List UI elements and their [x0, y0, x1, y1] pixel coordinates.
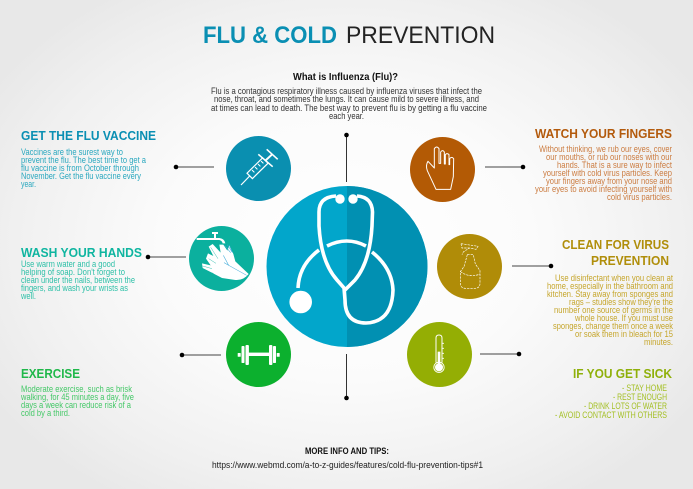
connector — [485, 165, 525, 169]
body text: days a week can reduce risk of a — [21, 400, 131, 410]
connector: bottom — [344, 354, 349, 400]
title: PREVENTION — [346, 22, 495, 49]
heading: GET THE FLU VACCINE — [21, 128, 156, 143]
body text: kitchen. Stay away from sponges and — [547, 289, 673, 299]
connector — [146, 255, 186, 259]
tips list: - REST ENOUGH — [613, 392, 667, 402]
title — [203, 22, 495, 49]
body text: cold by a third. — [21, 408, 70, 418]
connector: top — [344, 133, 349, 182]
icon: pointing hand — [410, 137, 475, 202]
body text: Vaccines are the surest way to — [21, 147, 123, 157]
heading — [562, 237, 669, 268]
panel: clean for virus prevention — [437, 234, 673, 347]
panel: wash your hands — [20, 226, 254, 301]
tips list: - DRINK LOTS OF WATER — [584, 401, 667, 411]
body text: whole house. If you must use — [574, 313, 673, 323]
footer: more info and tips — [212, 446, 483, 470]
body text: yourself with cold virus particles. Keep — [543, 168, 672, 178]
body text — [21, 147, 146, 189]
body text — [20, 259, 135, 301]
body text — [547, 273, 673, 347]
body text: prevent the flu. The best time to get a — [21, 155, 146, 165]
body text: helping of soap. Don't forget to — [21, 267, 125, 277]
intro text: Flu is a contagious respiratory illness caused by influenza viruses that infect the — [211, 86, 482, 96]
body text: Moderate exercise, such as brisk — [21, 384, 132, 394]
panel: watch your fingers — [410, 126, 672, 202]
body text: your fingers away from your nose and — [546, 176, 672, 186]
intro text: each year. — [329, 111, 364, 121]
body text: November. Get the flu vaccine every — [21, 171, 141, 181]
body text: well. — [20, 291, 36, 301]
footer heading: MORE INFO AND TIPS: — [305, 446, 389, 456]
intro text — [211, 86, 487, 121]
heading: WASH YOUR HANDS — [21, 245, 142, 260]
body text: year. — [21, 179, 36, 189]
heading: IF YOU GET SICK — [573, 366, 672, 381]
icon: spray bottle — [437, 234, 502, 299]
heading: WATCH YOUR FINGERS — [535, 126, 672, 141]
panel: if you get sick — [407, 322, 672, 420]
intro text: at times can lead to death. The best way to prevent flu is by getting a flu vaccine — [211, 103, 487, 113]
body text: walking, for 45 minutes a day, five — [20, 392, 134, 402]
panel: get the flu vaccine — [21, 128, 291, 201]
icon: thermometer — [407, 322, 472, 387]
intro block — [211, 72, 487, 121]
tips list — [555, 383, 667, 420]
body text: number one source of germs in the — [554, 305, 673, 315]
tips list: - STAY HOME — [622, 383, 667, 393]
body text: flu vaccine is from October through — [21, 163, 139, 173]
body text: home, especially in the bathroom and — [547, 281, 673, 291]
body text: fingers, and wash your wrists as — [21, 283, 128, 293]
icon: syringe — [226, 136, 291, 201]
body text: rags – studies show they're the — [569, 297, 673, 307]
body text: Use warm water and a good — [21, 259, 115, 269]
icon: dumbbell — [226, 322, 291, 387]
heading: EXERCISE — [21, 366, 80, 381]
panel: exercise — [20, 322, 291, 418]
title: FLU & COLD — [203, 22, 337, 49]
connector — [174, 165, 214, 169]
intro heading: What is Influenza (Flu)? — [293, 72, 398, 83]
central stethoscope icon — [266, 186, 428, 347]
body text: minutes. — [644, 337, 673, 347]
connector — [512, 264, 553, 268]
body text — [535, 144, 672, 202]
footer url: https://www.webmd.com/a-to-z-guides/features/cold-flu-prevention-tips#1 — [212, 460, 483, 470]
body text — [20, 384, 134, 418]
body text: clean under the nails, between the — [21, 275, 135, 285]
body text: hands. That is a sure way to infect — [557, 160, 672, 170]
icon: washing hands — [189, 226, 254, 291]
body text: Use disinfectant when you clean at — [555, 273, 673, 283]
intro text: nose, throat, and sometimes the lungs. It can cause mild to severe illness, and — [214, 94, 479, 104]
heading: PREVENTION — [591, 253, 669, 268]
body text: or soak them in bleach for 15 — [575, 329, 673, 339]
connector — [180, 353, 221, 357]
body text: sponges, change them once a week — [553, 321, 673, 331]
body text: cold virus particles. — [607, 192, 672, 202]
connector — [480, 352, 521, 356]
body text: our mouths, or rub our noses with our — [546, 152, 672, 162]
body text: your eyes to avoid infecting yourself with — [535, 184, 672, 194]
heading: CLEAN FOR VIRUS — [562, 237, 669, 252]
